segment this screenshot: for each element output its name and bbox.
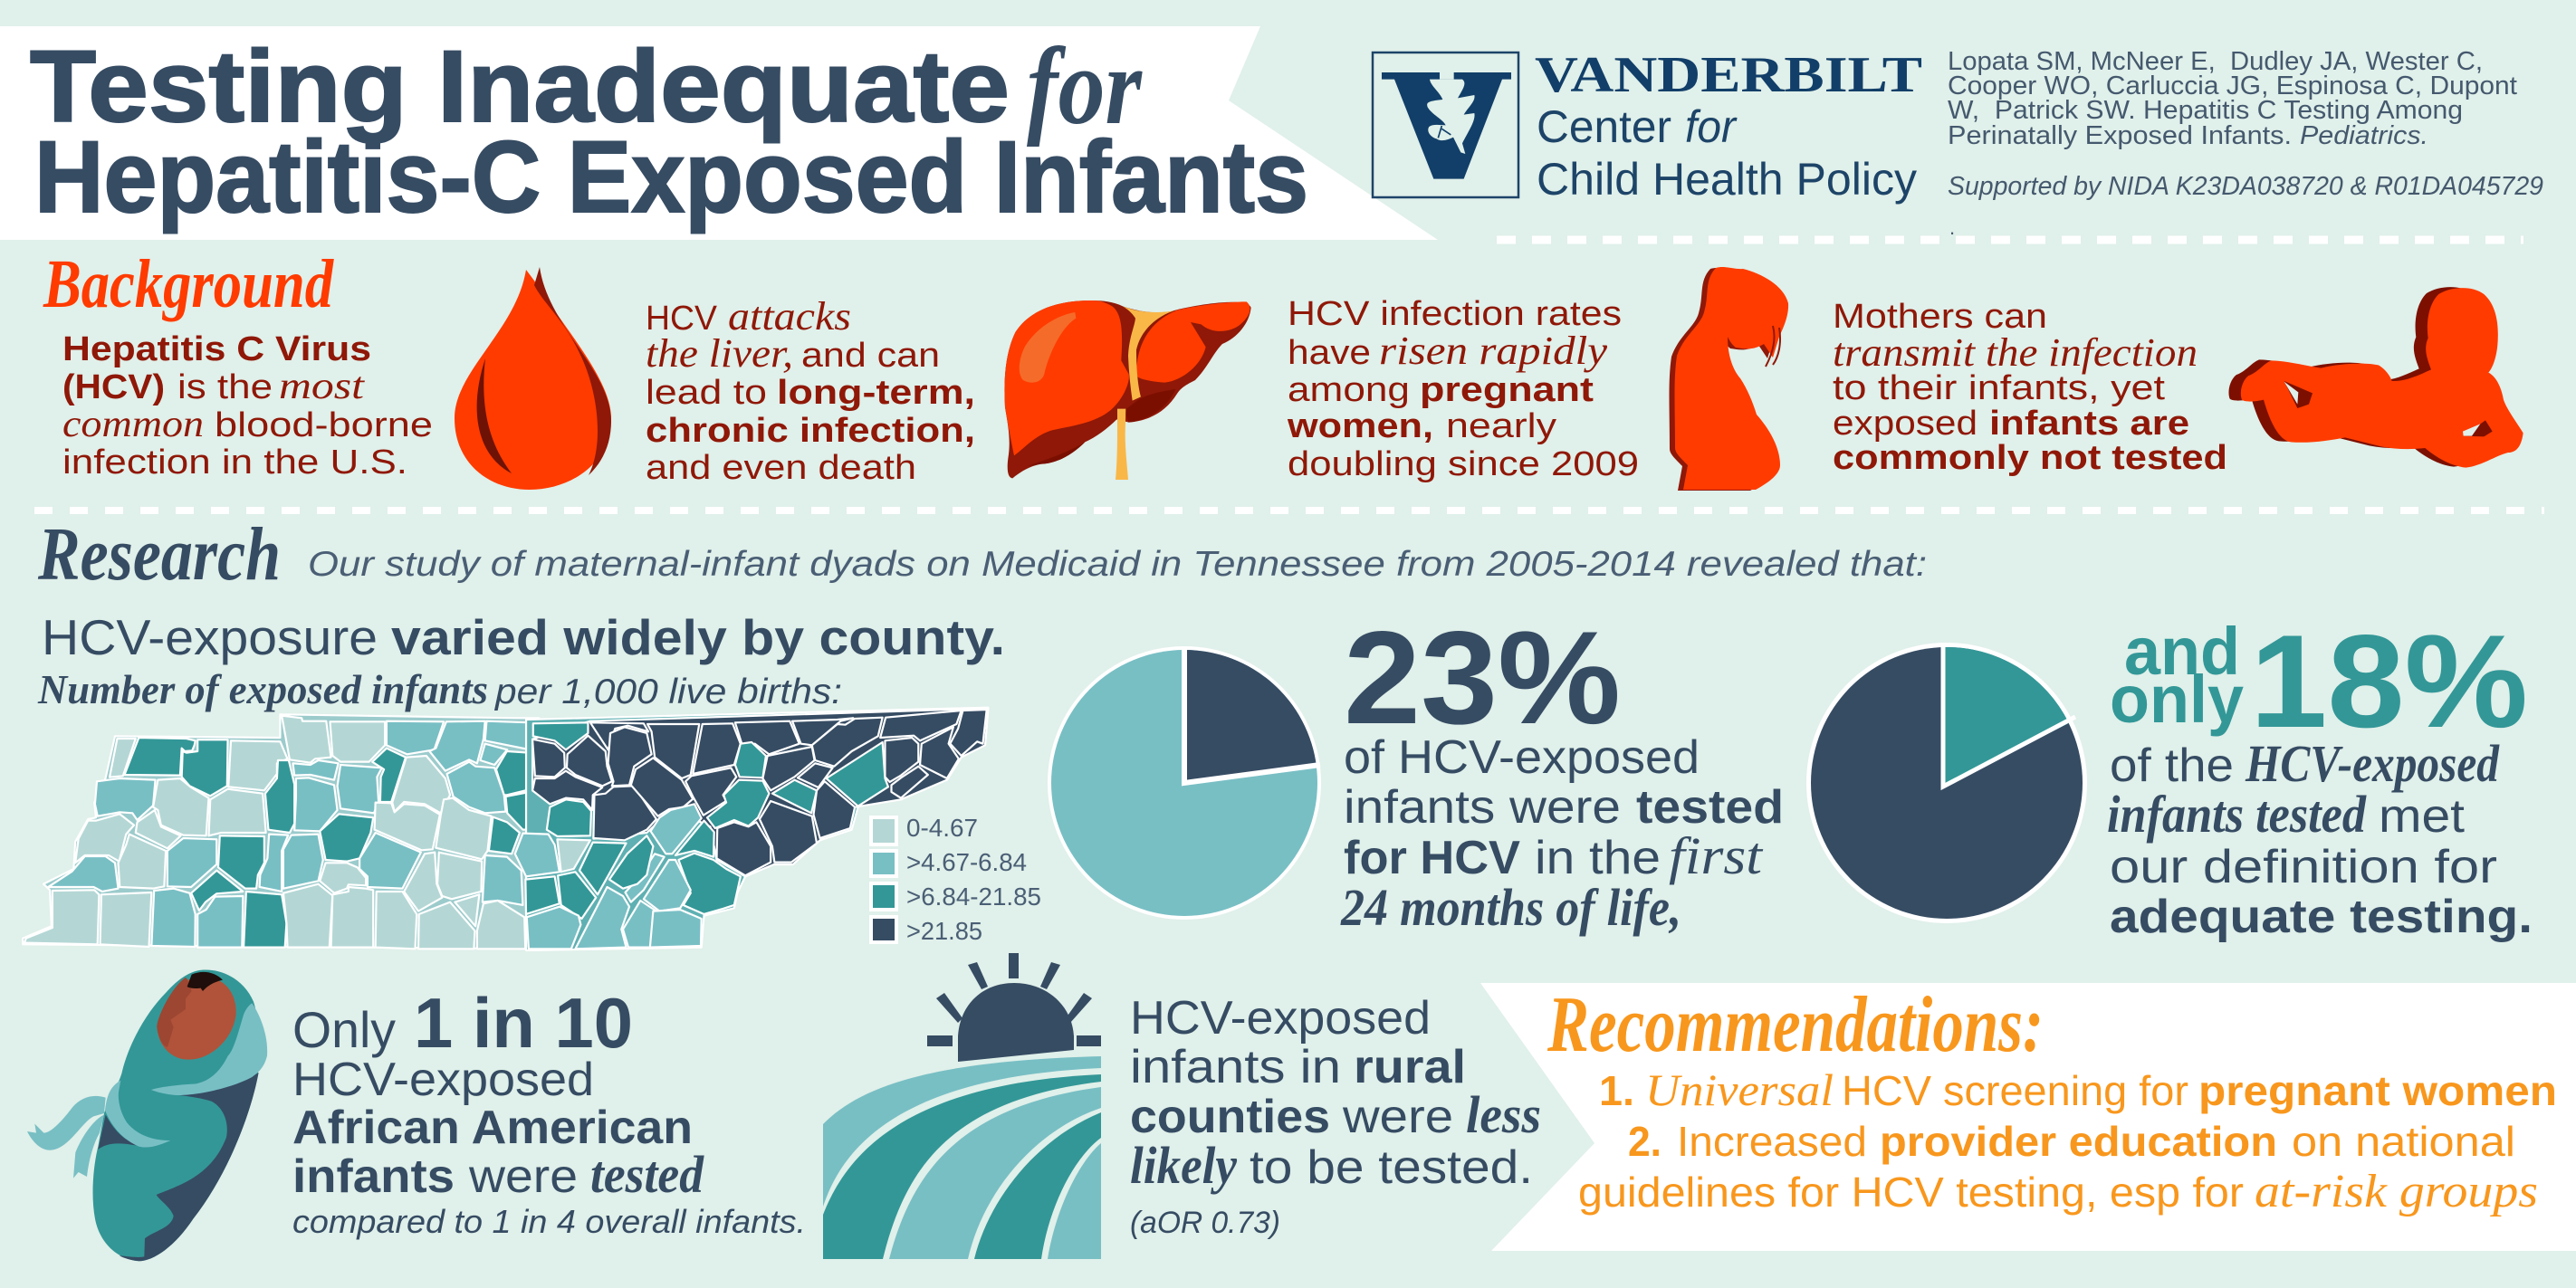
text: attacks the liver: the liver, (646, 331, 793, 376)
recommendation list: pregnant women (2198, 1067, 2557, 1114)
recommendation list: HCV screening for (1842, 1067, 2188, 1114)
text: mothers can transmit: Mothers can (1833, 298, 2047, 336)
text: mothers can transmit: infants are (1989, 405, 2189, 443)
title: for (1027, 25, 1143, 148)
heading: Background: Background (43, 246, 334, 322)
text: mothers can transmit: commonly not tested (1833, 439, 2227, 477)
title (30, 25, 1308, 234)
pie chart: 23 percent tested (1048, 646, 1321, 920)
heading: Recommendations: Recommendations: (1547, 981, 2044, 1069)
text: attacks the liver: and even death (646, 449, 916, 487)
text: hepatitis C virus (62, 330, 433, 482)
recommendation list: provider education (1880, 1118, 2277, 1165)
icon: pregnant woman silhouette (1670, 267, 1788, 491)
title banner (0, 25, 1438, 240)
text: hepatitis C virus: infection in the U.S. (62, 444, 407, 482)
text: 23 percent: first (1669, 826, 1764, 885)
icon: sunrise over farm fields (823, 953, 1101, 1259)
text: 18 percent (2107, 607, 2533, 943)
logo: Vanderbilt Center for Child Health Policy: VANDERBILT (1535, 47, 1922, 103)
text: exposure by county (37, 609, 1005, 712)
logo: Vanderbilt Center for Child Health Policy (1373, 47, 1922, 205)
text: 18 percent: 18% (2250, 607, 2528, 755)
text: infection rates risen: nearly (1446, 407, 1556, 445)
legend: 0-4.67 (906, 814, 978, 842)
text: mothers can transmit (1833, 298, 2227, 477)
text: 1 in 10 (292, 983, 806, 1240)
icon: infant silhouette (2228, 287, 2523, 468)
panel: recommendations (1480, 981, 2576, 1251)
recommendation list: 1. (1599, 1067, 1634, 1114)
text: rural counties: counties (1130, 1091, 1330, 1143)
title: Testing Inadequate (30, 30, 1010, 143)
text: rural counties: were (1342, 1091, 1453, 1143)
text: rural counties: (aOR 0.73) (1130, 1206, 1280, 1240)
text: 18 percent: HCV-exposed (2245, 734, 2500, 793)
text: 1 in 10: tested (590, 1145, 704, 1204)
text: 23 percent: of HCV-exposed (1344, 731, 1700, 784)
text: 23 percent: infants were (1344, 781, 1621, 834)
text: rural counties: to be tested. (1250, 1141, 1533, 1194)
legend (871, 814, 1041, 945)
text: infection rates risen: have (1288, 334, 1371, 372)
text: attacks the liver: and can (801, 337, 940, 375)
citation: Supported by NIDA K23DA038720 & R01DA045729 (1948, 172, 2543, 201)
text: rural counties: infants in (1130, 1041, 1341, 1093)
logo: Vanderbilt Center for Child Health Policy: for (1685, 101, 1738, 152)
text: infection rates risen: women, (1287, 407, 1433, 445)
citation: Perinatally Exposed Infants. (1948, 121, 2292, 150)
legend: >4.67-6.84 (906, 848, 1027, 876)
text: 1 in 10: Only (292, 1001, 396, 1058)
text: 1 in 10: HCV-exposed (292, 1054, 594, 1106)
citation: W, Patrick SW. Hepatitis C Testing Among (1948, 96, 2463, 125)
text: 18 percent: our definition for (2110, 841, 2497, 893)
heading: Research: Research (37, 512, 281, 596)
text: 1 in 10: African American (292, 1102, 693, 1154)
text: mothers can transmit: transmit the infection (1833, 330, 2198, 375)
map: Tennessee counties (23, 708, 988, 950)
text: 18 percent: infants tested (2107, 785, 2367, 844)
recommendation list: 2. (1628, 1118, 1661, 1165)
text: 18 percent: adequate testing. (2110, 891, 2533, 943)
text: rural counties (1130, 992, 1541, 1240)
citation: Pediatrics. (2300, 121, 2428, 150)
text: 1 in 10: compared to 1 in 4 overall infants. (292, 1203, 806, 1240)
citation: Lopata SM, McNeer E, Dudley JA, Wester C, (1948, 47, 2483, 76)
pie chart: 18 percent adequate (1806, 643, 2087, 923)
text: hepatitis C virus: (HCV) (62, 368, 165, 406)
icon: blood drop (455, 267, 611, 490)
text: 18 percent: and (2124, 614, 2240, 689)
citation: . (1949, 216, 1955, 239)
text: 23 percent: 23% (1344, 604, 1621, 751)
text: hepatitis C virus: common (62, 404, 204, 445)
text: hepatitis C virus: is the (177, 368, 273, 406)
text: rural counties: rural (1354, 1041, 1466, 1093)
text: hepatitis C virus: most (279, 366, 366, 407)
text: infection rates risen: doubling since 2009 (1288, 445, 1639, 483)
text: 23 percent: in the (1535, 832, 1661, 884)
text: mothers can transmit: exposed (1833, 405, 1977, 443)
title: Hepatitis-C Exposed Infants (34, 120, 1308, 234)
legend: >6.84-21.85 (906, 883, 1041, 911)
text: 18 percent: met (2379, 790, 2466, 843)
logo: Vanderbilt Center for Child Health Policy: Center (1537, 101, 1671, 152)
text: attacks the liver: lead to (646, 374, 767, 412)
text: study description: Our study of maternal-infant dyads on Medicaid in Tennessee from 2005-2014 revealed that: (308, 545, 1927, 584)
text: rural counties: HCV-exposed (1130, 992, 1431, 1045)
icon: liver (1004, 301, 1251, 480)
text: attacks the liver: HCV (646, 300, 718, 338)
icon: Vanderbilt V with oak leaf (1382, 72, 1511, 179)
text: attacks the liver: attacks (728, 294, 851, 339)
text: exposure by county: per 1,000 live births: (494, 673, 842, 711)
recommendation list: Increased (1677, 1118, 1867, 1165)
text: infection rates risen: pregnant (1420, 371, 1594, 409)
text: infection rates risen: among (1288, 371, 1410, 409)
text: rural counties: less (1466, 1085, 1541, 1144)
text: 23 percent (1340, 604, 1784, 937)
text: 23 percent: 24 months of life, (1340, 878, 1681, 937)
logo: Vanderbilt Center for Child Health Policy: Child Health Policy (1537, 154, 1917, 205)
text: exposure by county: varied widely by county. (391, 609, 1005, 665)
text: 1 in 10: infants (292, 1150, 455, 1203)
text: hepatitis C virus: Hepatitis C Virus (62, 330, 371, 368)
text: attacks the liver: chronic infection, (646, 412, 975, 450)
citation (1948, 47, 2543, 239)
text: infection rates risen: HCV infection rates (1288, 295, 1622, 333)
legend: >21.85 (906, 917, 982, 945)
text: 1 in 10: 1 in 10 (414, 983, 633, 1063)
text: infection rates risen: risen rapidly (1379, 329, 1608, 373)
text: 23 percent: for HCV (1344, 832, 1520, 884)
recommendation list (1578, 1064, 2557, 1217)
text: rural counties: likely (1130, 1136, 1237, 1195)
text: hepatitis C virus: blood-borne (215, 406, 433, 444)
citation: Cooper WO, Carluccia JG, Espinosa C, Dupont (1948, 72, 2517, 100)
recommendation list: Universal (1645, 1064, 1834, 1115)
text: infection rates risen (1287, 295, 1639, 483)
text: exposure by county: Number of exposed infants (37, 666, 488, 712)
text: exposure by county: HCV-exposure (42, 609, 378, 665)
text: 18 percent: only (2110, 662, 2244, 737)
recommendation list: guidelines for HCV testing, esp for (1578, 1169, 2244, 1216)
text: mothers can transmit: to their infants, yet (1833, 369, 2166, 407)
icon: swaddled baby (27, 970, 267, 1261)
text: 23 percent: tested (1636, 781, 1784, 834)
recommendation list: at-risk groups (2255, 1166, 2538, 1217)
text: 18 percent: of the (2110, 739, 2234, 792)
text: attacks the liver (646, 294, 975, 487)
text: 1 in 10: were (468, 1150, 578, 1203)
recommendation list: on national (2292, 1118, 2515, 1165)
text: attacks the liver: long-term, (777, 374, 975, 412)
